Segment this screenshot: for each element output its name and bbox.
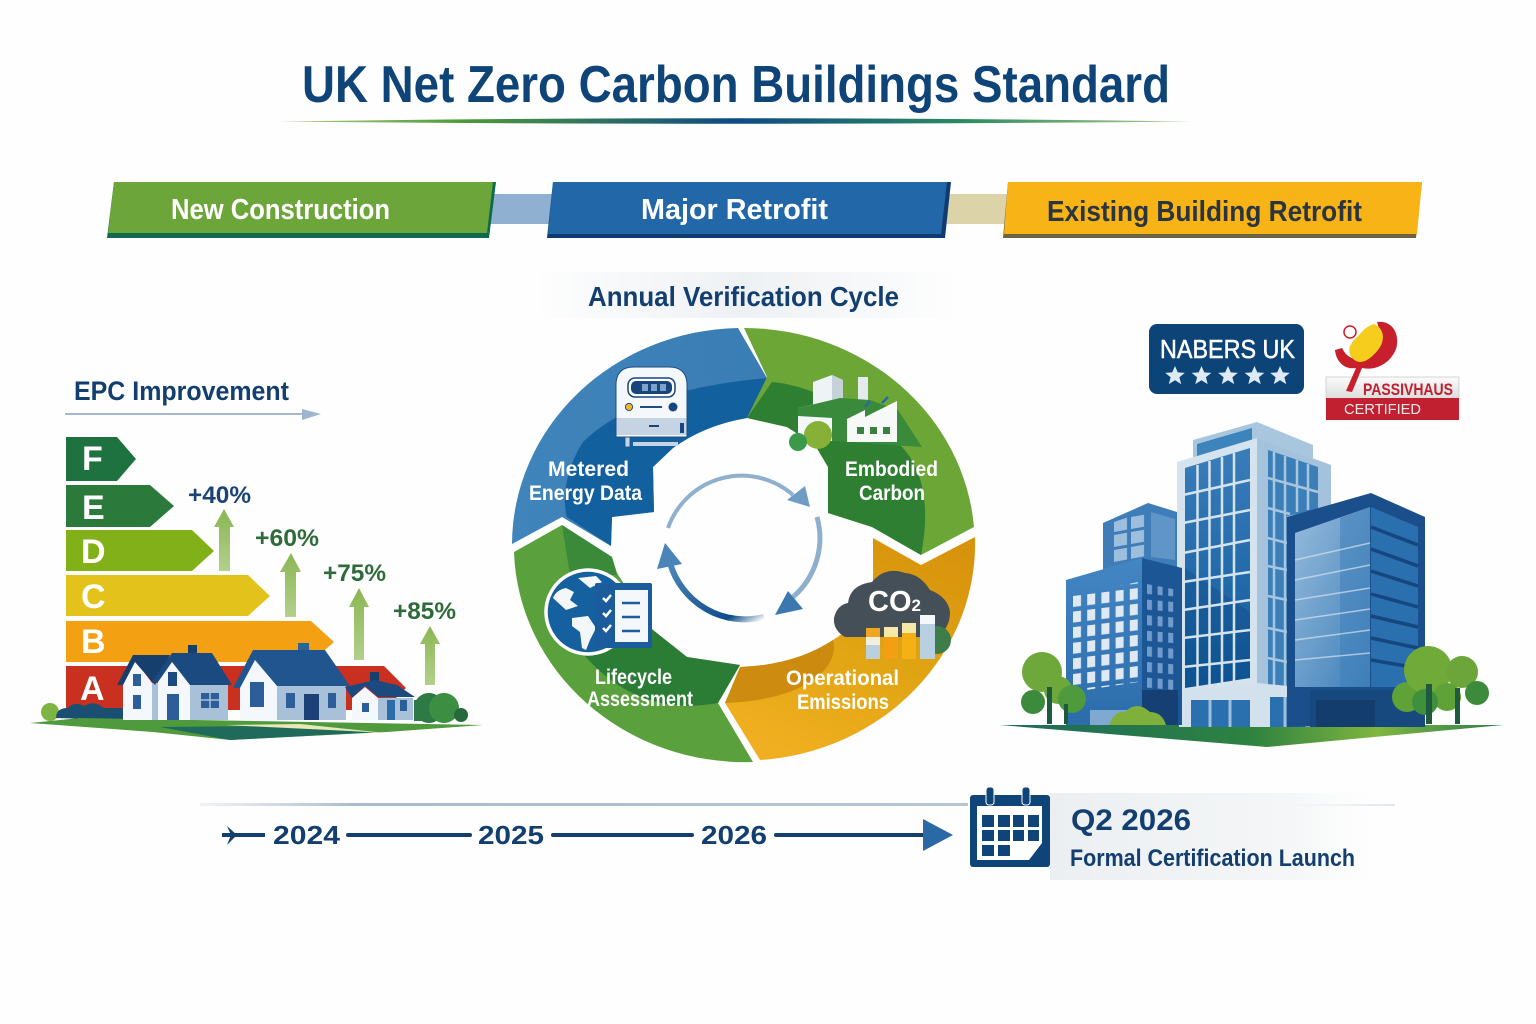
badge: Passivhaus certified	[1326, 322, 1459, 420]
segment: operational emissions: Operational	[786, 667, 899, 690]
improvement arrows and percentages: +60%	[255, 525, 319, 552]
timeline years: 2024	[273, 820, 341, 850]
callout: Q2 2026 launch	[970, 787, 1395, 880]
EPC rating bars: C	[81, 578, 106, 616]
timeline years: 2025	[478, 820, 544, 850]
callout: Q2 2026 launch: Formal Certification Launch	[1070, 845, 1355, 872]
trees and bushes	[1021, 646, 1489, 725]
icon: calendar	[970, 787, 1050, 867]
timeline	[200, 804, 1395, 851]
icon: CO2 cloud and bars: 2	[912, 596, 921, 615]
start marker	[222, 826, 265, 845]
heading: EPC improvement: EPC Improvement	[74, 376, 289, 406]
EPC rating bars: D	[81, 533, 106, 571]
tab: existing building retrofit: Existing Building Retrofit	[1047, 196, 1362, 228]
ground and bushes	[30, 693, 483, 740]
heading: annual verification cycle	[530, 272, 960, 318]
improvement arrows and percentages	[188, 482, 456, 685]
timeline line and arrow	[348, 819, 953, 851]
badge: NABERS UK	[1149, 324, 1304, 394]
improvement arrows and percentages: +85%	[393, 598, 456, 625]
icon: CO2 cloud and bars: CO	[868, 586, 912, 618]
ground	[1000, 725, 1503, 747]
tab: existing building retrofit	[1003, 182, 1422, 238]
segment: lifecycle assessment: Assessment	[587, 688, 693, 711]
tab: new construction: New Construction	[171, 194, 390, 226]
verification cycle ring	[512, 328, 975, 762]
timeline years	[273, 820, 767, 850]
badge: Passivhaus certified: PASSIVHAUS	[1363, 380, 1453, 399]
timeline years: 2026	[701, 820, 767, 850]
badge: Passivhaus certified: CERTIFIED	[1344, 401, 1421, 418]
segment: lifecycle assessment	[514, 525, 753, 762]
tab: major retrofit: Major Retrofit	[641, 194, 828, 226]
central tower	[1177, 422, 1331, 727]
improvement arrows and percentages: +40%	[188, 482, 251, 509]
EPC rating bars	[66, 437, 406, 710]
title: UK Net Zero Carbon Buildings Standard	[302, 56, 1170, 114]
EPC improvement panel	[30, 376, 483, 740]
segment: operational emissions: Emissions	[797, 691, 889, 714]
heading: annual verification cycle: Annual Verification Cycle	[588, 281, 899, 312]
segment: metered energy data	[512, 328, 767, 546]
segment: embodied carbon: Embodied	[845, 458, 938, 481]
category tabs	[107, 182, 1422, 238]
tab: major retrofit	[547, 182, 951, 238]
icon: energy meter	[616, 367, 687, 447]
EPC rating bars: B	[81, 623, 106, 661]
improvement arrows and percentages: +75%	[323, 560, 386, 587]
city buildings	[1000, 422, 1503, 747]
certification badges	[1149, 322, 1459, 420]
front left building	[1066, 558, 1182, 725]
callout: Q2 2026 launch: Q2 2026	[1071, 804, 1191, 837]
badge: NABERS UK: NABERS UK	[1160, 334, 1296, 364]
icon: globe and checklist	[546, 570, 652, 654]
EPC rating bars: A	[80, 670, 105, 708]
houses	[117, 643, 415, 720]
EPC rating bars: E	[82, 489, 105, 527]
segment: metered energy data: Metered	[548, 458, 629, 481]
back left building	[1103, 503, 1177, 572]
right building	[1287, 493, 1425, 727]
segment: operational emissions	[725, 537, 975, 760]
segment: embodied carbon	[744, 328, 974, 555]
heading: EPC improvement	[65, 376, 321, 420]
center arrows	[657, 476, 820, 619]
segment: lifecycle assessment: Lifecycle	[595, 666, 672, 689]
icon: factory	[789, 375, 922, 451]
segment: embodied carbon: Carbon	[859, 482, 925, 505]
icon: CO2 cloud and bars	[834, 571, 951, 659]
segment: metered energy data: Energy Data	[529, 482, 642, 505]
tab: new construction	[107, 182, 496, 238]
EPC rating bars: F	[82, 440, 103, 478]
